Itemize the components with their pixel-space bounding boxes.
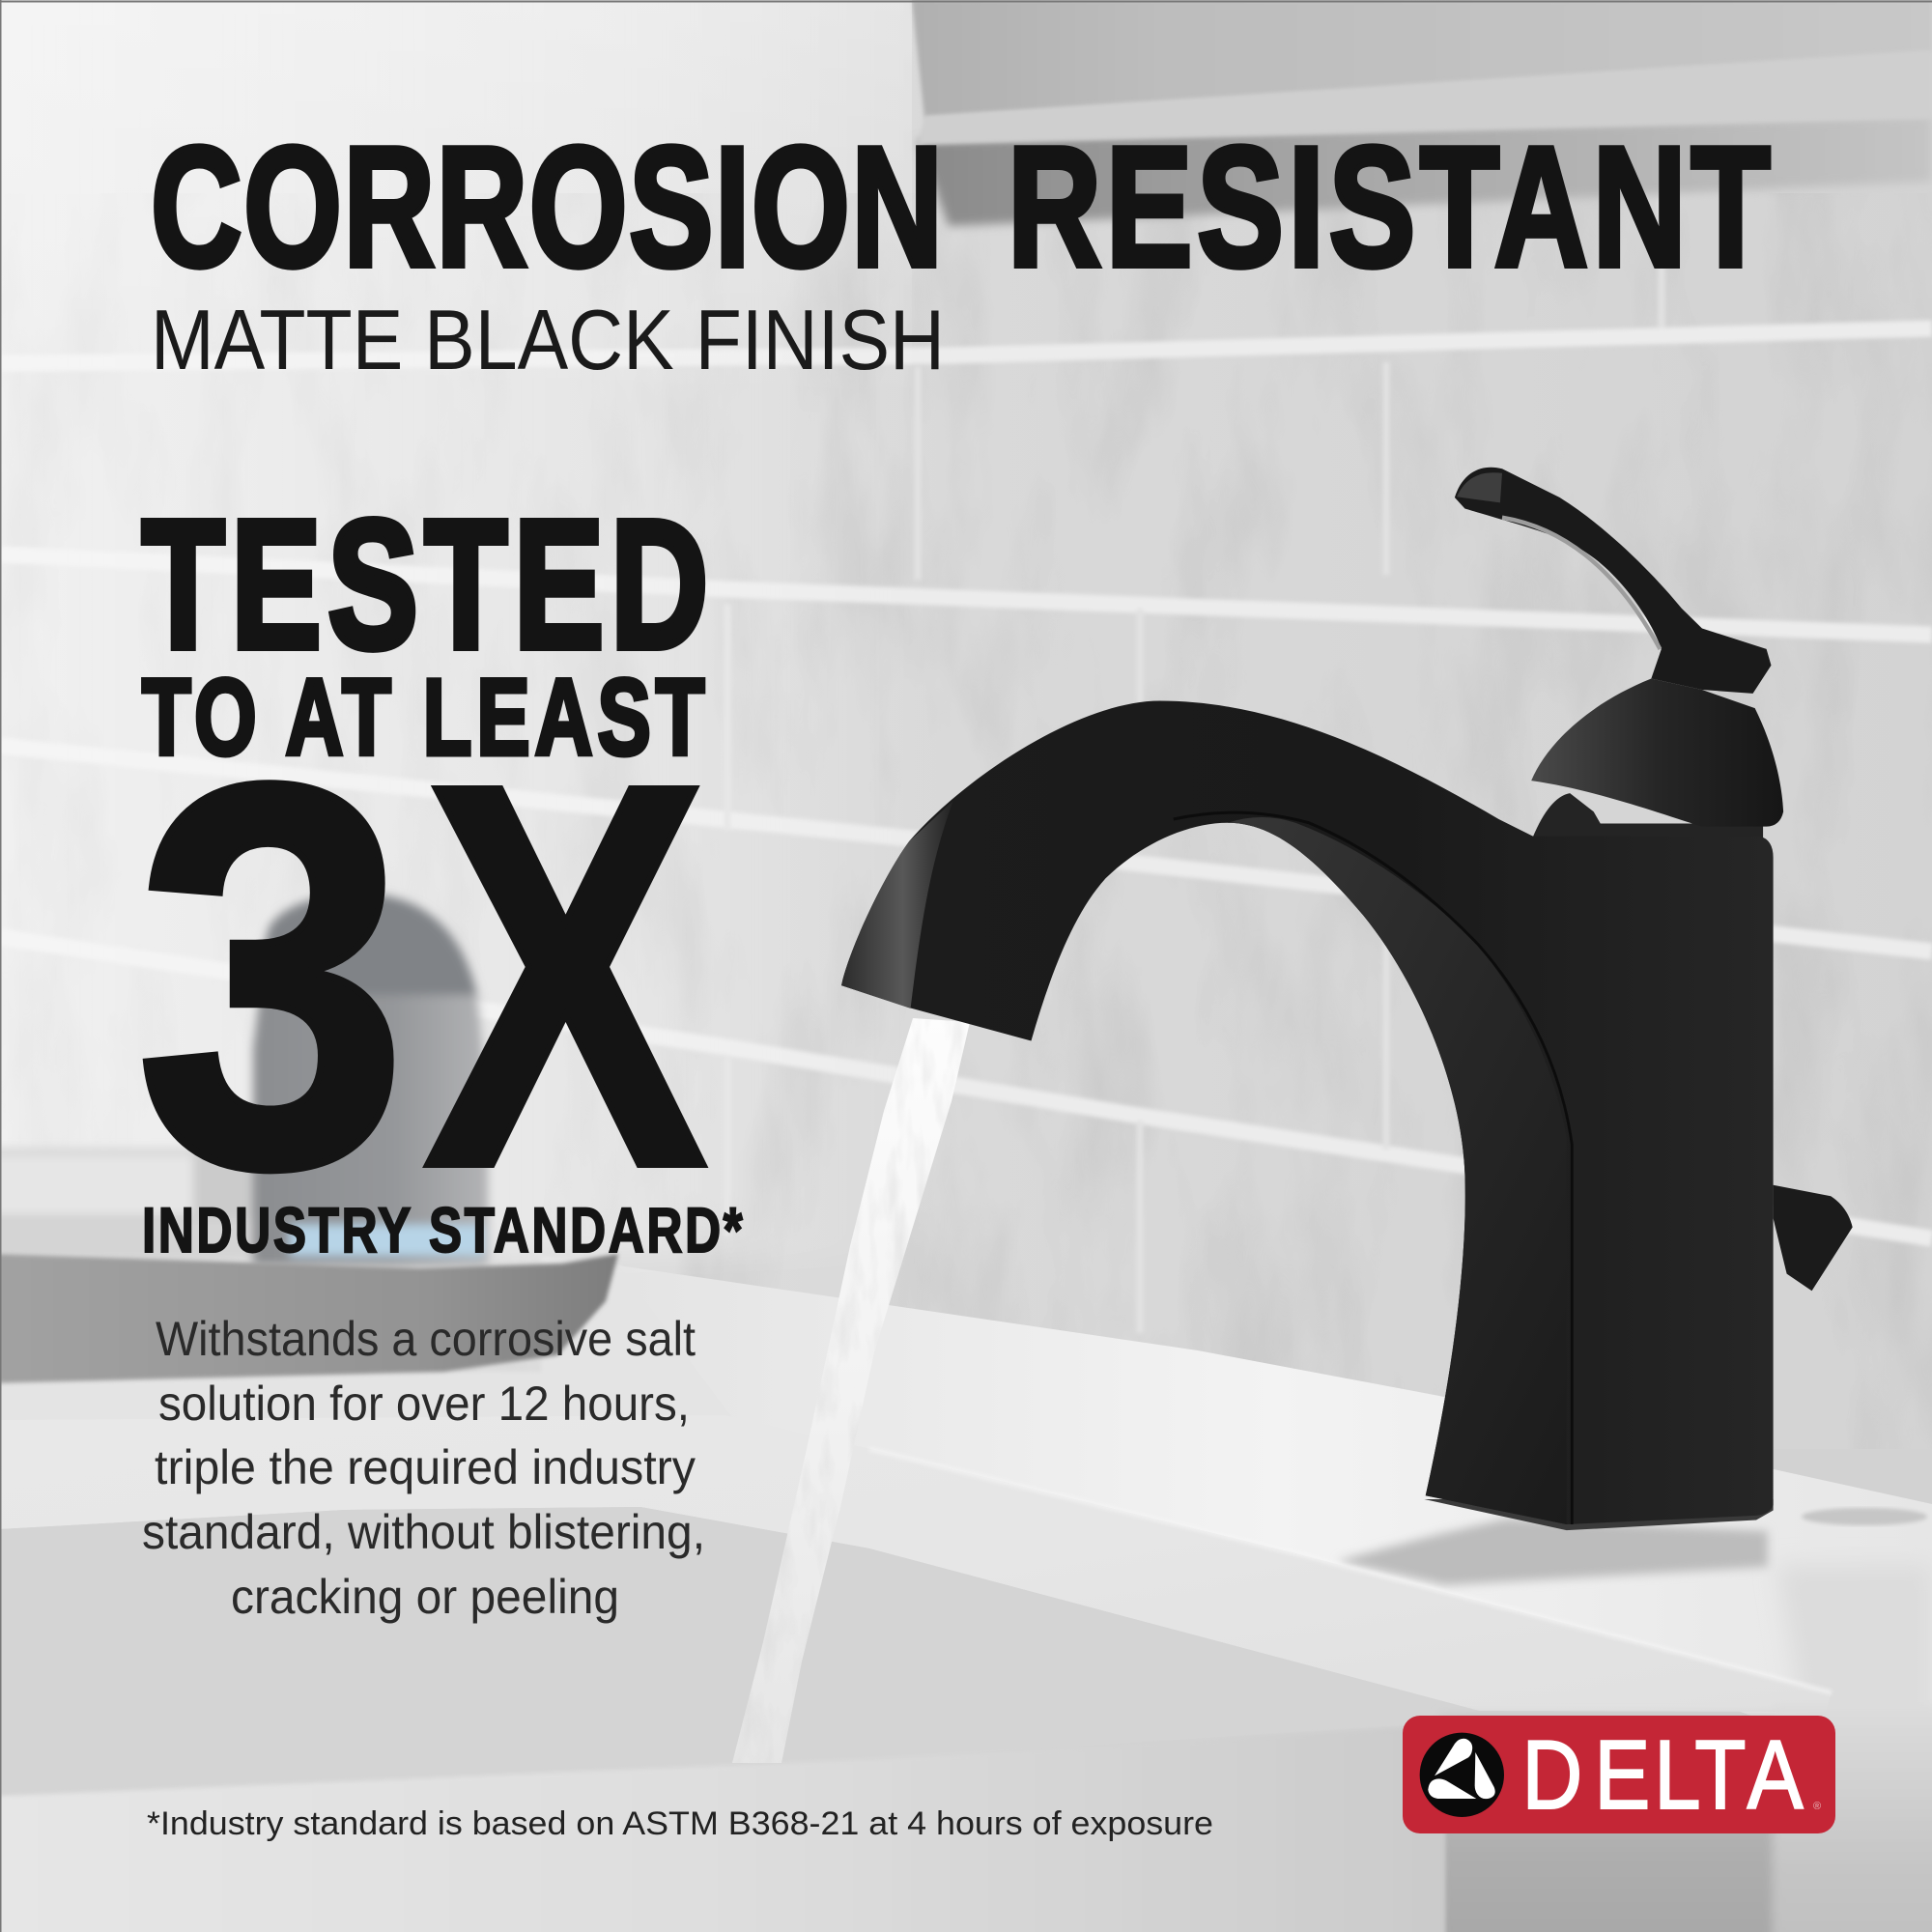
- description paragraph: Withstands a corrosive salt: [156, 1312, 696, 1366]
- jar: [253, 894, 488, 1265]
- counter edge highlight: [869, 1449, 1832, 1692]
- faucet: [841, 468, 1853, 1530]
- counter right fade: [1777, 1565, 1932, 1739]
- description paragraph: [142, 1312, 705, 1624]
- body seam line: [1174, 812, 1572, 1524]
- title: CORROSION: [151, 111, 943, 302]
- logo red plate: [1403, 1716, 1835, 1833]
- big 3X figure: [135, 670, 709, 1281]
- light wash over left side: [0, 0, 918, 1256]
- faucet base plate: [1424, 1499, 1774, 1530]
- basin lower panels: [1439, 1705, 1932, 1932]
- handle neck: [1533, 793, 1763, 838]
- inner arch band: [1228, 817, 1567, 1524]
- soap dish: [0, 1254, 618, 1383]
- basin interior: [0, 1449, 1932, 1932]
- description paragraph: standard, without blistering,: [142, 1505, 705, 1559]
- basin lip: [0, 1725, 1445, 1932]
- shelf upper face: [912, 0, 1932, 118]
- title: RESISTANT: [1008, 112, 1771, 302]
- metal bowl: [0, 1150, 309, 1261]
- lever highlight: [1502, 518, 1660, 649]
- logo triangle mark: [1420, 1733, 1504, 1817]
- numeral 3: 3: [135, 670, 408, 1280]
- description paragraph: cracking or peeling: [231, 1570, 619, 1624]
- basin dark column: [1439, 1715, 1773, 1932]
- subtitle: MATTE BLACK FINISH: [151, 292, 945, 387]
- handle dome: [1531, 679, 1783, 827]
- letter X: X: [424, 672, 709, 1281]
- title: [151, 111, 1771, 302]
- description paragraph: solution for over 12 hours,: [158, 1377, 690, 1431]
- counter top surface: [618, 1265, 1932, 1739]
- footnote: *Industry standard is based on ASTM B368-21 at 4 hours of exposure: [147, 1805, 1213, 1842]
- counter top left region: [0, 1256, 869, 1449]
- handle lever: [1455, 468, 1772, 694]
- spout end facet: [841, 801, 953, 1009]
- marble veining: [0, 193, 1932, 1546]
- to at least heading: TO AT LEAST: [142, 657, 704, 778]
- shelf ledge: [918, 50, 1932, 145]
- faucet reflection: [1802, 1508, 1927, 1525]
- faucet cast shadow: [1337, 1519, 1768, 1585]
- tested heading: TESTED: [142, 482, 708, 687]
- registered mark: ®: [1813, 1801, 1821, 1812]
- water stream: [724, 1014, 976, 1768]
- pop-up drain lever: [1774, 1185, 1853, 1291]
- Delta logo: [1403, 1716, 1835, 1833]
- shelf shadow underside: [918, 116, 1932, 226]
- spout and body: [841, 701, 1774, 1524]
- light wash over top: [0, 0, 912, 406]
- industry standard heading: INDUSTRY STANDARD*: [142, 1194, 743, 1265]
- right pale column: [1773, 1705, 1932, 1932]
- lever tip highlight: [1457, 472, 1502, 502]
- counter front face: [0, 1415, 1832, 1712]
- logo wordmark: DELTA: [1522, 1720, 1804, 1829]
- tile grout lines: [0, 198, 1932, 1333]
- basin left wall: [0, 1507, 1479, 1797]
- description paragraph: triple the required industry: [155, 1440, 696, 1494]
